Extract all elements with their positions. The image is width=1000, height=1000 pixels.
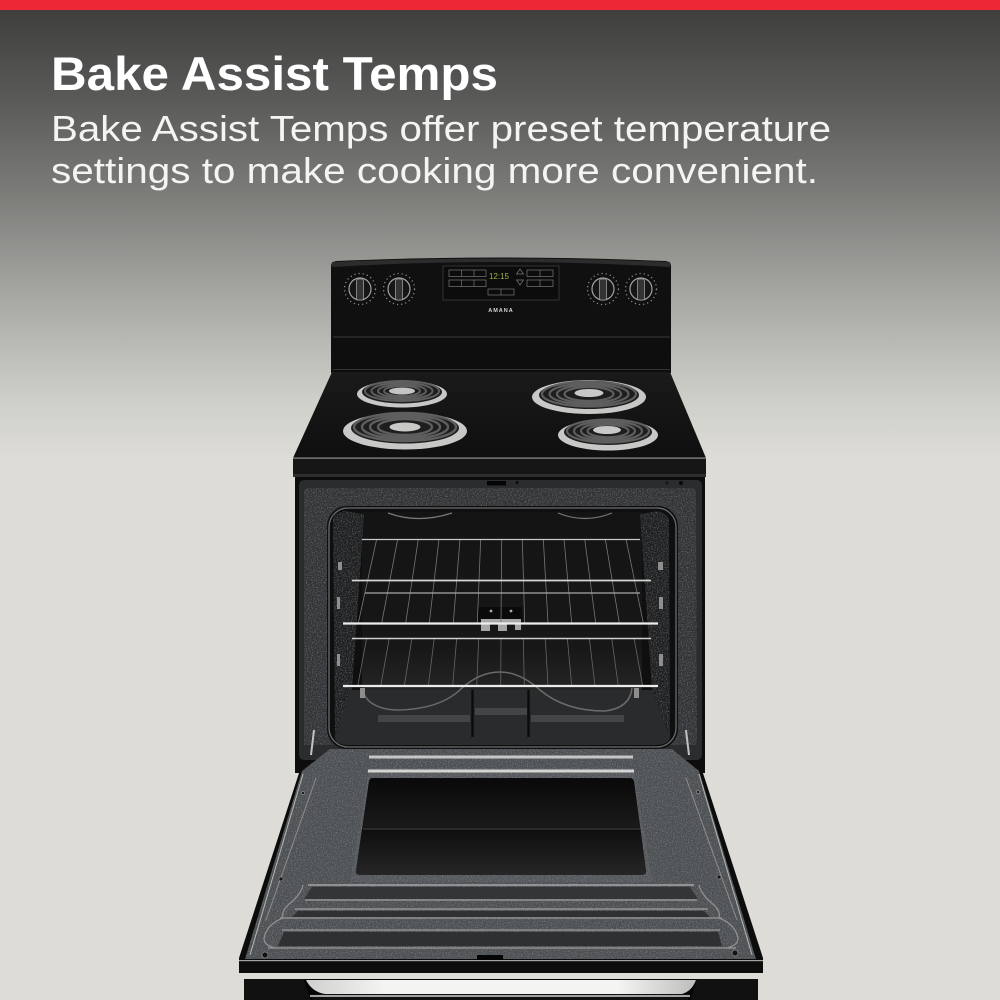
door hinges — [311, 730, 689, 755]
knob left 1 — [344, 274, 376, 304]
door window glass — [356, 778, 646, 875]
title: Bake Assist Temps — [51, 47, 498, 100]
control panel display — [443, 266, 559, 300]
rear shelf — [331, 336, 671, 373]
description text: Bake Assist Temps offer preset temperature — [51, 108, 831, 149]
door screws — [262, 790, 738, 958]
oven door — [239, 749, 763, 973]
door front edge — [239, 960, 763, 961]
door upper strip — [369, 756, 633, 758]
knob left 2 — [384, 274, 414, 304]
bake element — [362, 672, 632, 711]
control backguard — [331, 258, 671, 337]
description text — [51, 108, 831, 191]
lower oven rack — [343, 638, 658, 686]
burner front left — [343, 412, 467, 450]
range oven — [239, 258, 763, 1000]
brand name: AMANA — [488, 308, 514, 314]
oven cavity — [327, 506, 678, 749]
door latch slot — [477, 955, 503, 960]
bake element bracket — [360, 688, 639, 698]
upper oven rack — [343, 539, 658, 624]
rack side supports — [337, 562, 663, 666]
burner back left — [357, 380, 447, 408]
oven body frame — [295, 477, 705, 773]
description text: settings to make cooking more convenient. — [51, 150, 818, 191]
burner front right — [558, 419, 658, 450]
burner back right — [532, 380, 646, 414]
door pressed ribs — [250, 774, 752, 955]
knob right 1 — [588, 274, 618, 304]
cavity floor — [335, 690, 670, 745]
red top bar — [0, 0, 1000, 10]
knob right 2 — [626, 274, 656, 304]
top heating element reflections — [388, 513, 612, 518]
cavity side walls — [333, 511, 670, 738]
cooktop surface — [293, 372, 706, 458]
door window frame — [350, 768, 652, 882]
cavity back wall and floor — [362, 512, 642, 737]
lower drawer and handle — [244, 979, 758, 1000]
rack support bracket — [478, 607, 522, 631]
clock readout: 12:15 — [489, 272, 510, 281]
cooktop front edge — [293, 458, 706, 477]
